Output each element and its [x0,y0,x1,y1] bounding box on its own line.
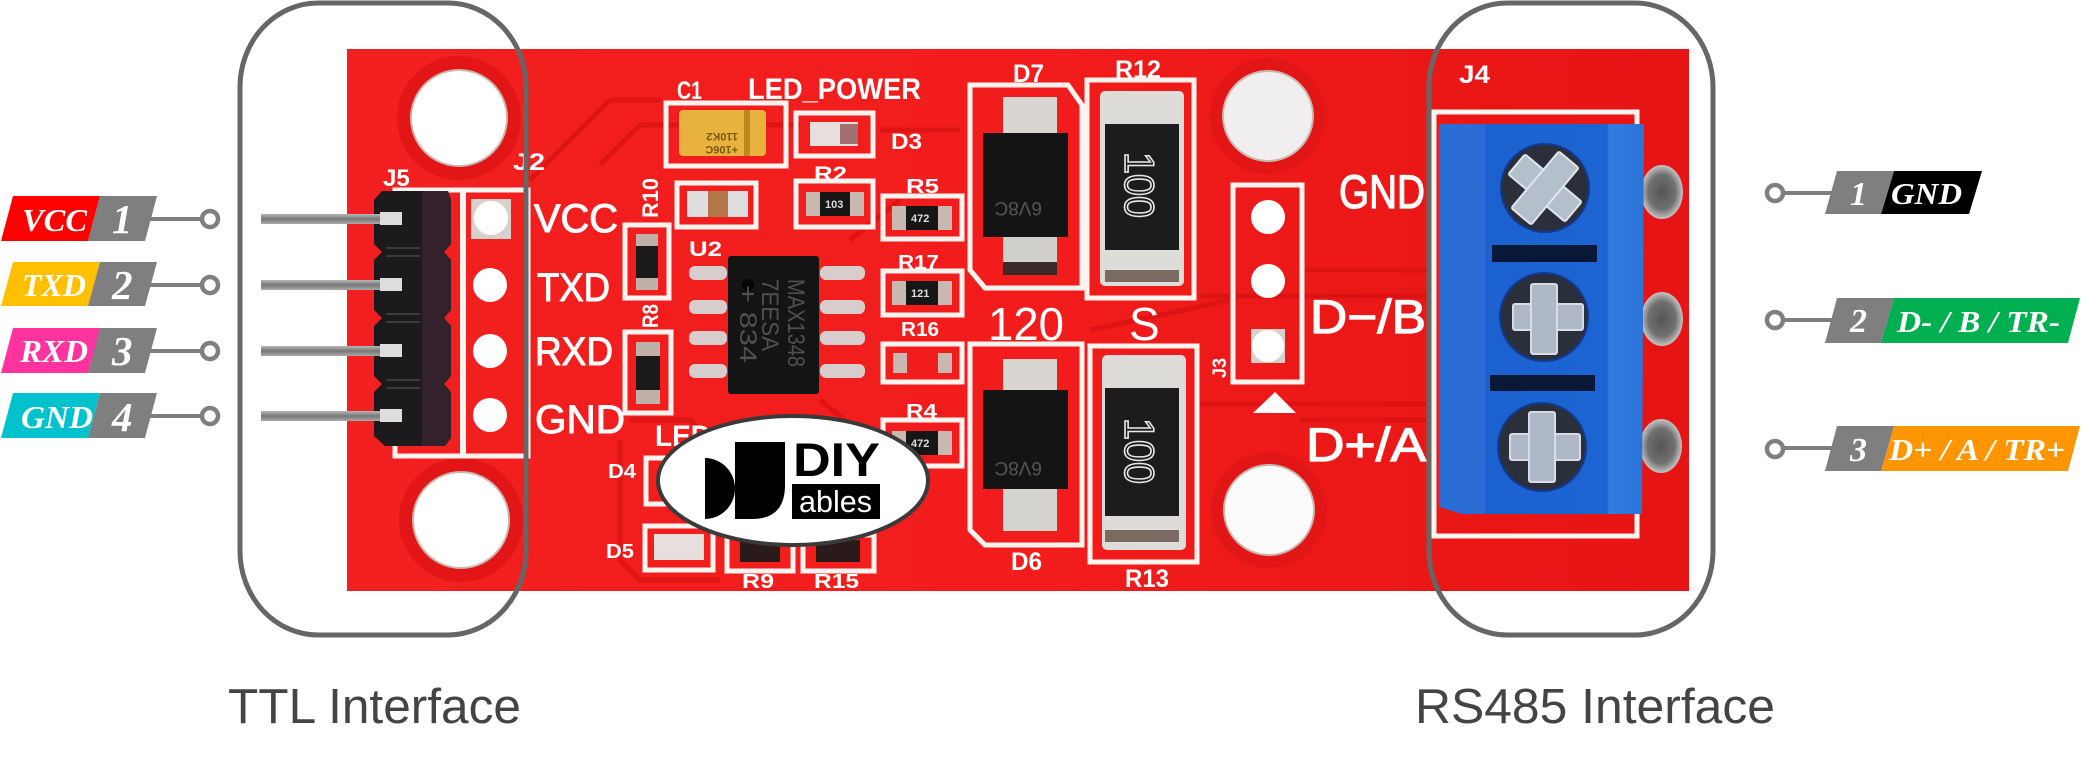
board labels TTL side: TXD [537,266,610,310]
board labels RS485 side [1306,165,1427,471]
board labels RS485 side: GND [1339,165,1425,218]
silkscreen 120 and S [988,298,1160,350]
resistor R2 [796,163,873,227]
pin label: GND 4 [1,393,218,440]
LED labels and lower row components: R15 [814,571,859,593]
DIYables logo badge [658,416,928,545]
pin label: 1 GND [1767,171,1982,214]
J3 header pads: J3 [1210,358,1231,378]
highlight: RS485 interface outline [1429,3,1713,635]
board labels RS485 side: D−/B [1310,290,1426,343]
capacitor C1 [666,77,786,166]
resistor R16 [883,319,962,382]
J4 label and frame [1434,61,1637,536]
logo text ables: ables [799,484,872,519]
LED power: LED_POWER [748,73,921,106]
TVS diode D6: 6V8C [994,457,1042,478]
resistor R17: 121 [911,288,929,300]
logo text DIY: DIY [793,433,880,486]
resistor R2: 103 [825,199,843,211]
pin label: RXD 3: 3 [111,328,132,374]
resistor R4: R4 [906,401,938,423]
TVS diode D7 [970,60,1082,288]
pin label: RXD 3: RXD [19,333,88,369]
resistor R10: R10 [638,178,663,218]
J3 header pads [1210,185,1302,413]
MAX1348 chip U2: + 834 [734,285,761,363]
resistor R13: R13 [1125,565,1169,593]
board labels TTL side: RXD [535,330,613,374]
LED labels and lower row components [606,420,874,593]
pin label: TXD 2: TXD [22,267,86,303]
pin label: VCC 1: 1 [112,196,132,242]
copper traces [530,100,1430,580]
screw 3 [1498,403,1586,491]
MAX1348 chip U2: U2 [689,238,722,261]
resistor R16: R16 [901,319,939,341]
pin label: TXD 2 [1,262,218,308]
TVS diode D6: D6 [1011,548,1042,576]
resistor R8 [625,304,671,413]
pin label: 2 D- / B / TR-: D- / B / TR- [1896,304,2060,339]
J4 label and frame: J4 [1459,61,1490,89]
pin label: 2 D- / B / TR- [1767,298,2080,343]
board labels TTL side: VCC [534,197,618,241]
silkscreen 120 and S: 120 [988,298,1064,350]
silkscreen 120 and S: S [1129,298,1160,350]
screw 2 [1500,273,1588,361]
TVS diode D6 [970,344,1082,576]
panel: red PCB board [261,49,1689,593]
MAX1348 chip U2 [689,238,865,394]
MAX1348 chip U2: 7EESA [756,279,783,351]
LED labels and lower row components: LED [655,420,711,453]
resistor R12: 100 [1116,152,1163,218]
TVS diode D7: D7 [1013,60,1044,88]
board labels TTL side: GND [535,398,625,442]
J5 / J2 silkscreen frame [383,149,545,456]
heading: TTL Interface: TTL Interface [228,680,521,734]
LED labels and lower row components: D5 [606,541,634,563]
resistor R8: R8 [638,304,663,328]
resistor R5 [883,176,962,239]
small component R7 [677,183,756,227]
pin label: VCC 1 [1,196,218,242]
LED labels and lower row components: D4 [608,461,637,483]
highlight: TTL interface outline [240,3,526,635]
TVS diode D7: 6V8C [994,197,1042,218]
resistor R12 [1087,56,1194,298]
capacitor C1: +106C [705,143,738,155]
board labels TTL side [534,197,625,442]
LED power [748,73,922,156]
board labels RS485 side: D+/A [1306,418,1427,471]
pin label: GND 4: GND [21,399,93,435]
pin label: 1 GND: GND [1891,176,1962,211]
resistor R17 [883,252,962,315]
pin label: 2 D- / B / TR-: 2 [1849,303,1867,340]
pin label: 3 D+ / A / TR+: 3 [1849,432,1867,469]
pin label: 3 D+ / A / TR+ [1767,426,2080,471]
MAX1348 chip U2: MAX1348 [782,279,809,367]
resistor R5: R5 [906,176,939,198]
logo mark [705,442,785,519]
resistor R13: 100 [1116,418,1163,484]
pin label: TXD 2: 2 [111,262,132,308]
LED labels and lower row components: R9 [742,571,774,593]
pin label: VCC 1: VCC [22,202,88,238]
J2 through-hole pads [471,199,511,432]
header metal pins [261,212,402,422]
4-pin header [374,191,451,446]
resistor R4 [883,401,962,466]
heading: RS485 Interface: RS485 Interface [1415,680,1775,734]
screw 1 [1493,136,1597,240]
resistor R12: R12 [1115,56,1161,84]
resistor R13 [1090,346,1197,593]
capacitor C1: C1 [677,77,702,105]
resistor R2: R2 [814,163,847,186]
blue screw terminal [1439,124,1644,514]
LED power: D3 [891,129,922,154]
resistor R5: 472 [911,213,929,225]
pin label: GND 4: 4 [111,394,132,440]
solder joints [1640,165,1683,473]
pin label: 3 D+ / A / TR+: D+ / A / TR+ [1888,432,2065,467]
mounting holes [397,56,1327,582]
J5 / J2 silkscreen frame: J5 [383,165,410,192]
capacitor C1: 110K2 [706,130,738,142]
pin label: 1 GND: 1 [1850,176,1867,213]
resistor R4: 472 [911,438,929,450]
pin label: RXD 3 [1,328,218,374]
J5 / J2 silkscreen frame: J2 [513,149,545,176]
resistor R10 [625,178,669,298]
resistor R17: R17 [898,252,939,274]
